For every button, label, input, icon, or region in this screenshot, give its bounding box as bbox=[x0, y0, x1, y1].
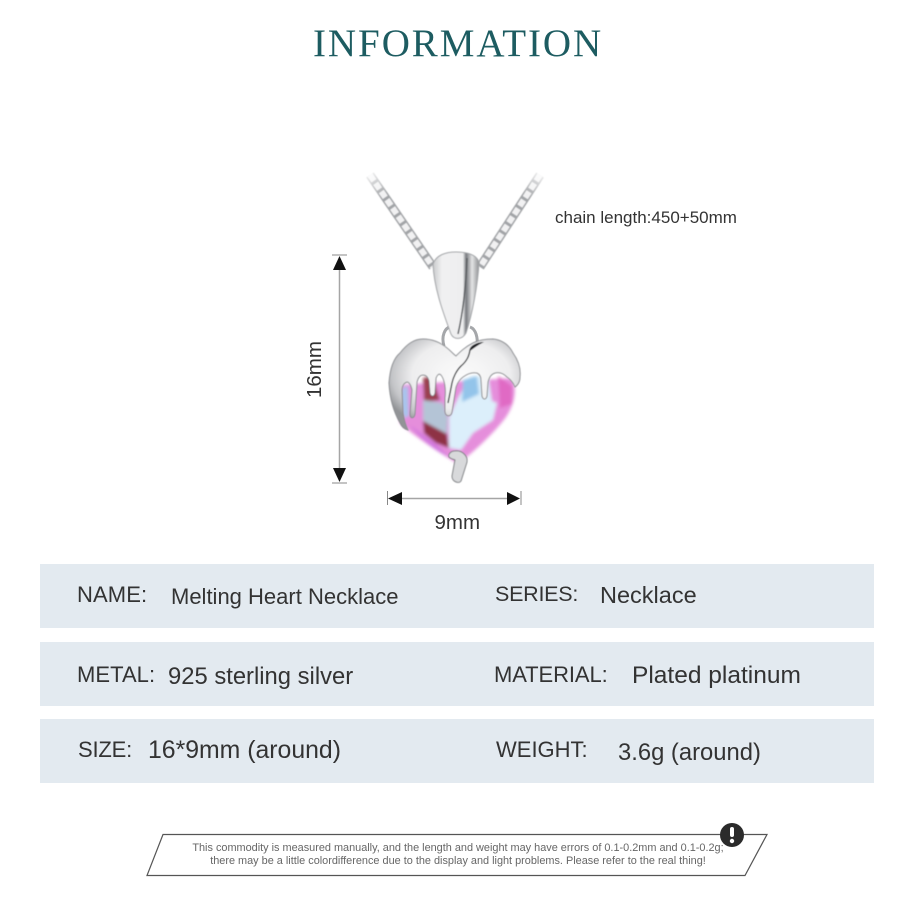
pendant bail bbox=[433, 252, 479, 338]
material value: Plated platinum bbox=[632, 662, 801, 689]
melting silver heart cap bbox=[389, 339, 520, 482]
label: 9mm: 9mm bbox=[434, 511, 480, 534]
size label: SIZE: bbox=[78, 737, 132, 762]
pendant jump ring bbox=[443, 327, 477, 346]
panel: metal and material bbox=[40, 642, 874, 706]
panel: size and weight bbox=[40, 719, 874, 783]
label: chain length: chain length:450+50mm bbox=[555, 208, 737, 227]
chain: left bbox=[369, 172, 433, 267]
series value: Necklace bbox=[600, 582, 697, 608]
material label: MATERIAL: bbox=[494, 662, 608, 687]
weight value: 3.6g (around) bbox=[618, 739, 761, 766]
label: 16mm: 16mm bbox=[303, 341, 326, 398]
disclaimer box bbox=[146, 823, 768, 876]
size value: 16*9mm (around) bbox=[148, 737, 341, 764]
title: INFORMATION bbox=[313, 22, 603, 65]
dimension arrow: 16mm height bbox=[332, 255, 347, 483]
icon: warning bbox=[720, 823, 744, 847]
weight label: WEIGHT: bbox=[496, 737, 588, 762]
disclaimer text: there may be a little colordifference due to the display and light problems. Please refer to the real thing! bbox=[210, 855, 706, 867]
name label: NAME: bbox=[77, 582, 147, 607]
chain: right bbox=[480, 172, 541, 267]
series label: SERIES: bbox=[495, 582, 578, 606]
name value: Melting Heart Necklace bbox=[171, 584, 398, 609]
metal value: 925 sterling silver bbox=[168, 663, 353, 690]
panel: name and series bbox=[40, 564, 874, 628]
dimension arrow: 9mm width bbox=[388, 491, 521, 505]
disclaimer text: This commodity is measured manually, and the length and weight may have errors of 0.1-0.2mm and 0.1-0.2g; bbox=[192, 842, 724, 854]
disclaimer text bbox=[192, 842, 724, 867]
metal label: METAL: bbox=[77, 662, 155, 687]
heart gem bbox=[398, 376, 515, 464]
